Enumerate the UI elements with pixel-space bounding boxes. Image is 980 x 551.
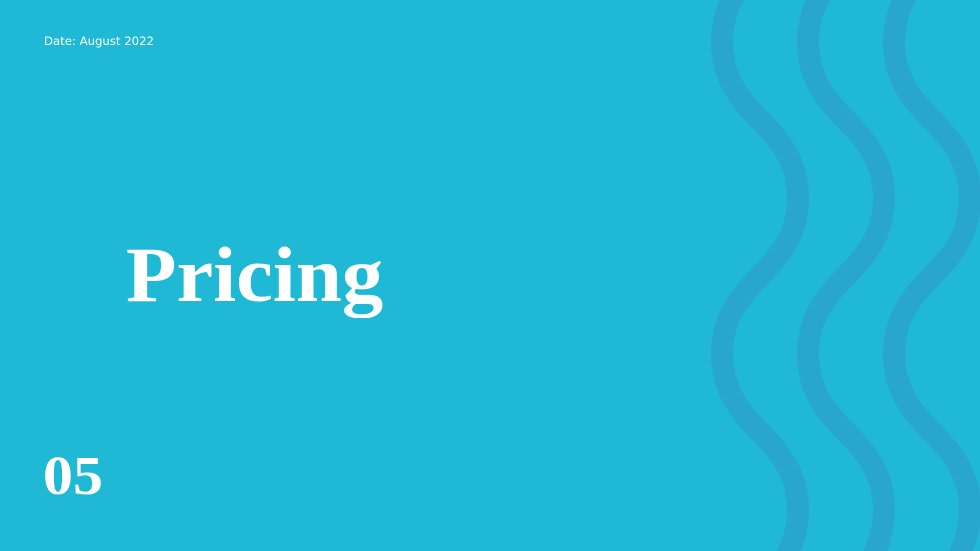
title: Pricing — [126, 231, 383, 318]
date label: Date: August 2022 — [44, 34, 154, 48]
section number: 05 — [43, 445, 103, 506]
